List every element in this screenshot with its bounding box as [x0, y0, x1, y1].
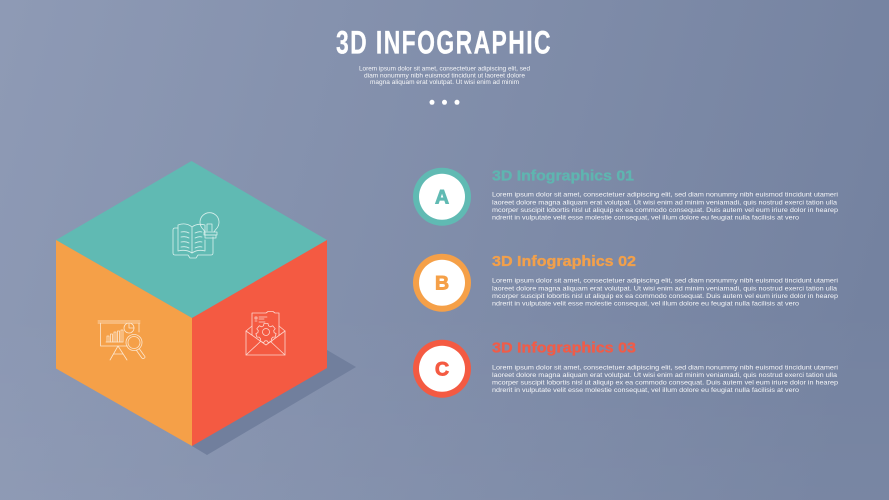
3D cube — [56, 161, 327, 446]
subtitle text — [359, 66, 530, 86]
body text 01: laoreet dolore magna aliquam erat volutpat. Ut wisi enim ad minim veniamadi, quis nostrud exerci tation ulla — [492, 199, 837, 206]
badge B: B — [435, 272, 449, 294]
body text 02: ndrerit in vulputate velit esse molestie consequat, vel illum dolore eu feugiat nulla facilisis at vero — [492, 300, 799, 308]
body text 01: Lorem ipsum dolor sit amet, consectetuer adipiscing elit, sed diam nonummy nibh euismod tincidunt utameri — [492, 192, 839, 199]
subtitle text: Lorem ipsum dolor sit amet, consectetuer adipiscing elit, sed — [359, 66, 530, 72]
badge A: A — [435, 186, 449, 208]
item C — [413, 340, 839, 398]
item A — [413, 168, 839, 226]
body text 01 — [492, 192, 839, 222]
decorative dots — [430, 100, 460, 105]
heading 01: 3D Infographics 01 — [492, 168, 634, 184]
cube left face — [56, 240, 192, 446]
item B — [413, 254, 839, 312]
heading 03: 3D Infographics 03 — [492, 341, 636, 357]
icon: envelope with gear document — [246, 312, 285, 355]
badge C: C — [435, 358, 449, 380]
body text 03: ndrerit in vulputate velit esse molestie consequat, vel illum dolore eu feugiat nulla facilisis at vero — [492, 387, 799, 394]
body text 01: ndrerit in vulputate velit esse molestie consequat, vel illum dolore eu feugiat nulla facilisis at vero — [492, 214, 799, 222]
subtitle text: diam nonummy nibh euismod tincidunt ut laoreet dolore — [364, 72, 526, 80]
body text 03 — [492, 364, 839, 394]
body text 03: Lorem ipsum dolor sit amet, consectetuer adipiscing elit, sed diam nonummy nibh euismod tincidunt utameri — [492, 364, 839, 371]
badge B — [413, 254, 471, 312]
icon: book and light bulb — [173, 213, 219, 258]
badge A — [413, 168, 471, 226]
body text 03: laoreet dolore magna aliquam erat volutpat. Ut wisi enim ad minim veniamadi, quis nostrud exerci tation ulla — [492, 372, 837, 379]
cube right face — [192, 240, 327, 446]
body text 02: laoreet dolore magna aliquam erat volutpat. Ut wisi enim ad minim veniamadi, quis nostrud exerci tation ulla — [492, 285, 837, 292]
body text 01: mcorper suscipit lobortis nisl ut aliquip ex ea commodo consequat. Duis autem vel eum iriure dolor in hearep — [492, 207, 838, 214]
heading 02: 3D Infographics 02 — [492, 254, 636, 270]
icon: presentation board with magnifier — [98, 321, 145, 360]
body text 02 — [492, 278, 839, 308]
body text 02: mcorper suscipit lobortis nisl ut aliquip ex ea commodo consequat. Duis autem vel eum iriure dolor in hearep — [492, 293, 838, 300]
badge C — [413, 340, 471, 398]
body text 03: mcorper suscipit lobortis nisl ut aliquip ex ea commodo consequat. Duis autem vel eum iriure dolor in hearep — [492, 380, 838, 386]
subtitle text: magna aliquam erat volutpat. Ut wisi enim ad minim — [370, 79, 519, 86]
cube shadow — [192, 350, 356, 455]
title: 3D INFOGRAPHIC — [336, 25, 552, 61]
body text 02: Lorem ipsum dolor sit amet, consectetuer adipiscing elit, sed diam nonummy nibh euismod tincidunt utameri — [492, 278, 839, 285]
cube top face — [56, 161, 327, 318]
